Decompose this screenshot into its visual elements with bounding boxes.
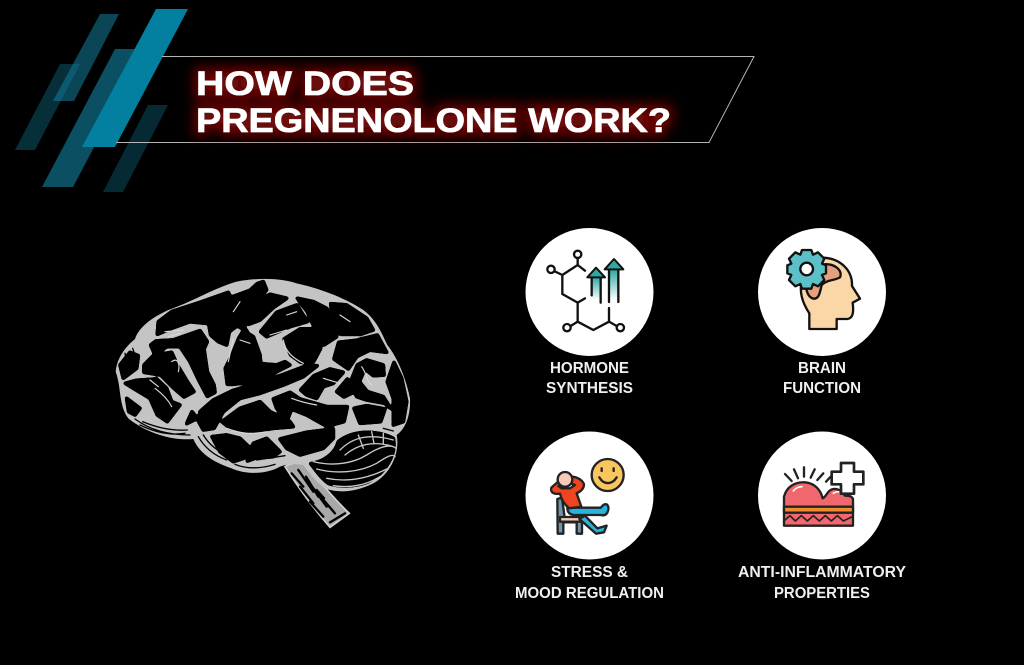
icon circle [526,432,654,560]
icon circle [526,228,654,356]
cerebellum dark [311,432,394,486]
item: hormone synthesis [526,228,654,397]
label [783,360,861,397]
icon circle [758,432,886,560]
feathered detail strokes [150,302,372,433]
icon: head with gear [787,250,860,329]
black gyri [120,282,407,486]
cerebellum folds [313,432,396,487]
item: brain function [758,228,886,397]
item: anti-inflammatory properties [738,432,906,602]
brain silhouette [116,279,410,491]
item: stress and mood regulation [515,432,664,602]
title [196,65,671,140]
brain hatching [125,348,393,468]
label: STRESS & [551,564,628,581]
label [738,564,906,602]
label: FUNCTION [783,380,861,397]
icon: molecule with arrows [547,251,624,331]
icon: relaxed person with smiley [551,459,624,534]
title frame [116,56,754,142]
label: ANTI-INFLAMMATORY [738,564,906,581]
decorative stripes [15,9,188,192]
label: BRAIN [798,360,846,377]
brain illustration [116,279,410,527]
label: PROPERTIES [774,585,870,602]
label: MOOD REGULATION [515,585,664,602]
title: HOW DOES [196,65,414,103]
label [515,564,664,602]
brain stem hatching [292,470,345,522]
icon circle [758,228,886,356]
brain stem [285,463,349,527]
label: HORMONE [550,360,629,377]
label [546,360,633,397]
title: PREGNENOLONE WORK? [196,102,671,140]
label: SYNTHESIS [546,380,633,397]
icon: inflamed skin with plus [784,463,863,526]
